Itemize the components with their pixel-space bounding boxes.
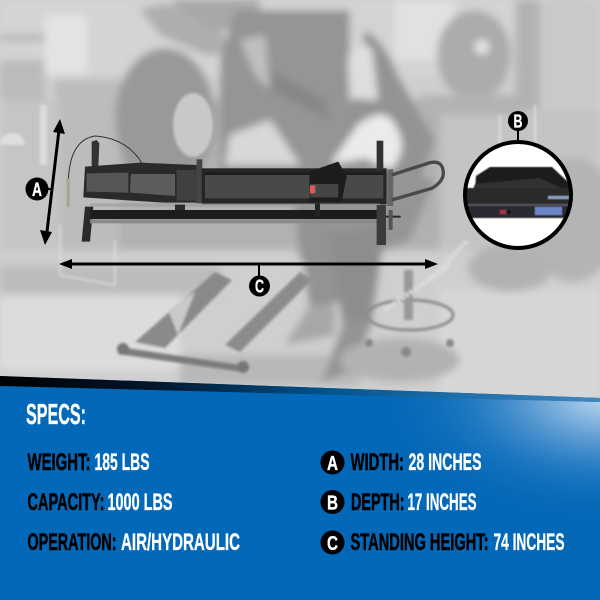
panel glow [0, 386, 600, 600]
spec: width: 28 INCHES [408, 449, 482, 476]
scissor lift base [135, 272, 232, 348]
hydraulic hose [68, 136, 142, 180]
woman [345, 30, 435, 180]
right uprights [377, 141, 383, 171]
detail photo [464, 167, 574, 218]
spec: operation: OPERATION: [28, 529, 116, 556]
detail callout B [464, 111, 574, 248]
heading: specs: SPECS: [26, 399, 86, 431]
light tyre rim [173, 93, 213, 157]
spec: depth: DEPTH: [351, 489, 404, 516]
spec: operation: AIR/HYDRAULIC [121, 529, 240, 556]
background photo: workshop with motorcycle and rider [0, 0, 600, 400]
spec: depth: B [327, 492, 338, 514]
spec: depth: 17 INCHES [408, 489, 476, 516]
right bed [202, 168, 387, 204]
stool [367, 300, 453, 330]
spec: standing height: STANDING HEIGHT: [350, 529, 488, 556]
spec: depth [320, 489, 476, 516]
slanted dark band [0, 376, 600, 402]
fan [437, 10, 511, 100]
badge B: B [514, 112, 522, 132]
handle bar [392, 162, 443, 200]
spec: capacity: 1000 LBS [108, 489, 172, 516]
spec: standing height: C [327, 533, 338, 555]
arrow A [26, 119, 65, 245]
lift platform product image [67, 136, 443, 245]
badge C [249, 276, 270, 296]
spec: weight: WEIGHT: [28, 449, 90, 476]
right wheel [528, 158, 600, 282]
spec: weight: 185 LBS [94, 449, 150, 476]
base rail [90, 210, 380, 219]
left uprights [92, 140, 99, 167]
motorcycle [115, 48, 215, 188]
arrow C [59, 259, 438, 296]
left bed [83, 163, 197, 203]
badge A: A [32, 180, 42, 201]
spec: capacity: CAPACITY: [28, 489, 104, 516]
badge C: C [255, 276, 264, 296]
spec: width: A [327, 453, 338, 475]
middle joint [197, 159, 202, 203]
spec: width: WIDTH: [350, 449, 404, 476]
spec: width [320, 449, 482, 476]
wheel chock [309, 162, 347, 202]
specs panel [0, 376, 600, 600]
